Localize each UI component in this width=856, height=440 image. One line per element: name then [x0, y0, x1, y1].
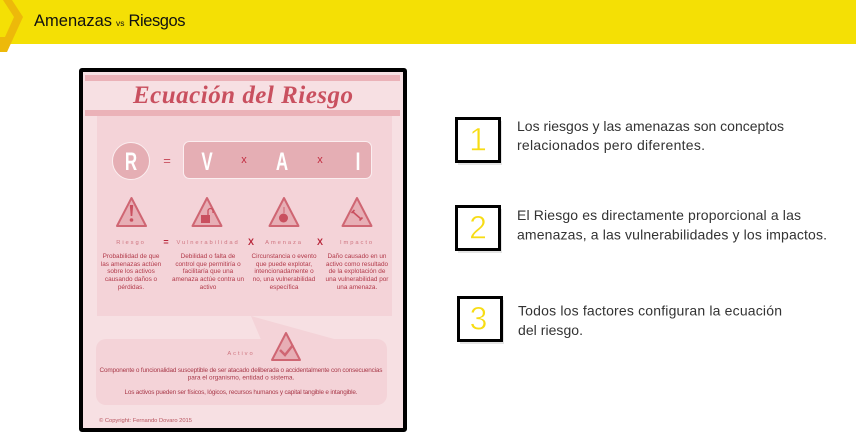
- column: Riesgo: [101, 240, 162, 291]
- equation: R = V x A x I: A: [276, 148, 288, 176]
- column: Vulnerabilidad: activo: [200, 284, 217, 291]
- operator: times: X: [248, 237, 254, 247]
- column: Vulnerabilidad: [172, 240, 245, 291]
- column: Impacto: [326, 240, 389, 291]
- panel: Activo: [96, 316, 387, 405]
- header bar: [0, 0, 856, 52]
- column: Riesgo: las amenazas actúen: [101, 261, 162, 268]
- item 3: Todos los factores configuran la ecuación: [518, 302, 782, 318]
- column: Amenaza: no, una vulnerabilidad: [253, 276, 316, 283]
- icon: check triangle: [272, 333, 300, 360]
- equation: R = V x A x I: =: [163, 153, 171, 168]
- column: Amenaza: que puede explotar,: [256, 261, 312, 268]
- equation: R = V x A x I: x: [317, 154, 323, 166]
- column: Riesgo: Probabilidad de que: [103, 253, 160, 260]
- icon: bomb triangle: [270, 198, 298, 226]
- equation: R = V x A x I: R: [125, 148, 137, 176]
- equation: R = V x A x I: I: [356, 148, 360, 176]
- column: Impacto: activo como resultado: [326, 261, 389, 268]
- item 3: 3: [470, 300, 487, 336]
- panel: Activo: para el organismo, entidad o sistema.: [188, 374, 295, 382]
- item 1: relacionados pero diferentes.: [517, 137, 705, 153]
- title: Amenazas vsRiesgos: [34, 12, 185, 30]
- column: Amenaza: específica: [270, 284, 299, 291]
- panel: Activo: Componente o funcionalidad susceptible de ser atacado deliberada o accidentalmente con consecuencias: [100, 367, 382, 374]
- equation: R = V x A x I: V: [201, 148, 213, 176]
- operator: equals: =: [163, 237, 169, 247]
- equation: R = V x A x I: [112, 142, 372, 180]
- icon: broken bone triangle: [342, 198, 372, 226]
- item 2: amenazas, a las vulnerabilidades y los impactos.: [517, 226, 827, 242]
- column: Amenaza: intencionadamente o: [254, 268, 314, 275]
- column: Impacto: de la explotación de: [329, 268, 386, 275]
- column: Vulnerabilidad: amenaza actúe contra un: [172, 276, 245, 283]
- column: Riesgo: pérdidas.: [118, 284, 144, 291]
- panel: risk equation card: [81, 70, 405, 430]
- column: Vulnerabilidad: Vulnerabilidad: [176, 240, 240, 246]
- item 1: 1: [469, 122, 487, 158]
- column: Amenaza: Amenaza: [265, 240, 303, 246]
- item 1: [456, 118, 784, 165]
- chevron icon: [0, 0, 23, 52]
- item 2: [456, 206, 827, 253]
- panel: Activo: Los activos pueden ser físicos, lógicos, recursos humanos y capital tangible e intangible.: [124, 389, 358, 396]
- item 3: [458, 298, 782, 344]
- column: Amenaza: [251, 240, 317, 291]
- column: Vulnerabilidad: Debilidad o falta de: [181, 253, 236, 260]
- column: Vulnerabilidad: control que permitiría o: [175, 261, 241, 268]
- operator: times: X: [317, 237, 323, 247]
- column: Vulnerabilidad: facilitaría que una: [183, 268, 234, 275]
- icon: warning triangle: [117, 198, 146, 226]
- column: Impacto: una amenaza.: [337, 284, 377, 291]
- column: Riesgo: Riesgo: [116, 240, 146, 246]
- column: Amenaza: Circunstancia o evento: [251, 253, 317, 260]
- icon: open padlock triangle: [192, 198, 222, 226]
- item 2: El Riesgo es directamente proporcional a las: [517, 207, 801, 223]
- panel: Activo: Activo: [227, 351, 255, 357]
- column: Impacto: Impacto: [340, 240, 374, 246]
- column: Riesgo: causando daños o: [105, 276, 158, 283]
- item 1: Los riesgos y las amenazas son conceptos: [517, 118, 784, 134]
- column: Impacto: Daño causado en un: [328, 253, 387, 260]
- item 3: del riesgo.: [518, 322, 583, 338]
- column: Riesgo: sobre los activos: [107, 268, 155, 275]
- item 2: 2: [469, 210, 487, 246]
- equation: R = V x A x I: x: [241, 154, 247, 166]
- copyright: © Copyright: Fernando Dovaro 2015: [99, 417, 192, 424]
- heading: Ecuación del Riesgo: Ecuación del Riesgo: [132, 82, 353, 109]
- column: Impacto: una vulnerabilidad por: [326, 276, 389, 283]
